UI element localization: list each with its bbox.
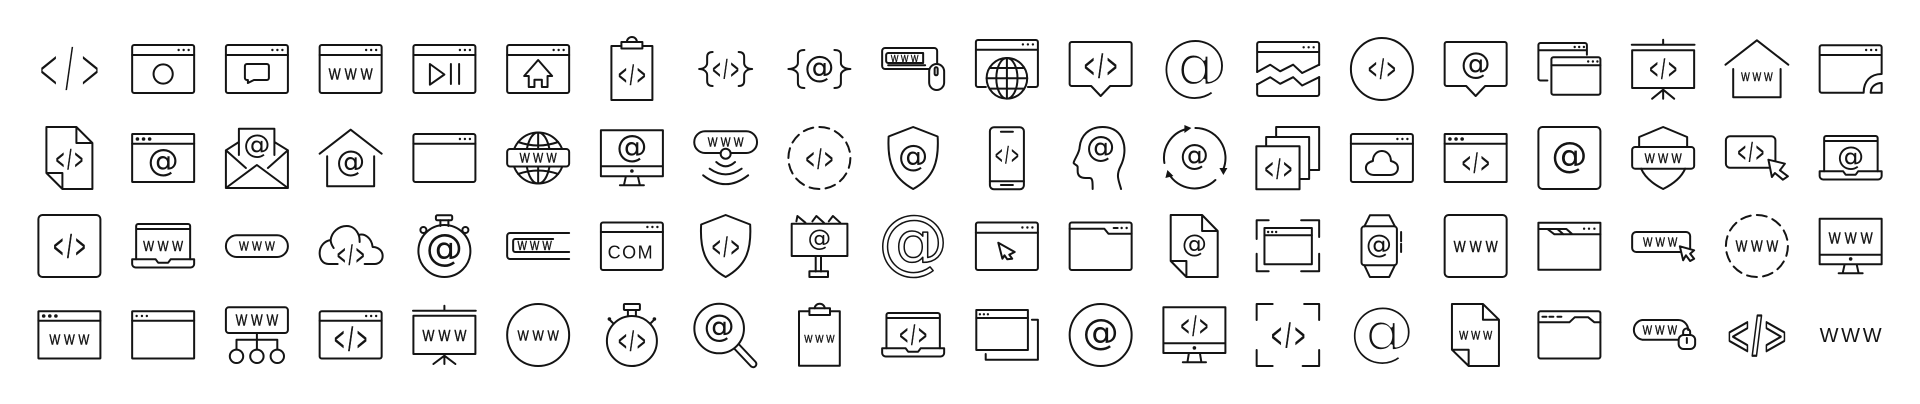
icon: presentation board with code: </> bbox=[1649, 54, 1680, 85]
icon: rounded square with at sign: @ bbox=[1551, 136, 1587, 177]
icon: two overlapping windows bbox=[1538, 43, 1600, 95]
icon: www box with cursor bbox=[1632, 232, 1694, 261]
icon: browser with code bbox=[1445, 134, 1507, 182]
icon: www address bar: WWW bbox=[517, 240, 555, 253]
icon: rounded square with www bbox=[1445, 215, 1507, 277]
icon: clipboard with code: </> bbox=[618, 59, 649, 91]
icon: browser with www: WWW bbox=[329, 66, 377, 84]
icon: code in scan brackets bbox=[1257, 304, 1319, 366]
icon: browser with tabs bbox=[1538, 223, 1600, 270]
icon: code box with cursor: </> bbox=[1738, 138, 1767, 168]
icon: clipboard with www: WWW bbox=[804, 333, 837, 346]
icon: browser with large code: </> bbox=[334, 321, 371, 358]
icon: stopwatch with code: </> bbox=[618, 325, 649, 357]
icon: shield with www label bbox=[1632, 127, 1694, 189]
icon: code tag: </> bbox=[39, 36, 107, 104]
icon: house with www bbox=[1726, 40, 1788, 97]
icon: code in circle bbox=[1351, 38, 1413, 100]
icon: at sign: @ bbox=[1348, 291, 1416, 370]
icon: outlined code tag: </> bbox=[1728, 305, 1789, 366]
icon: clipboard with www bbox=[799, 304, 840, 366]
icon: shield with code: </> bbox=[712, 232, 743, 263]
icon: shield with at sign bbox=[888, 127, 938, 189]
icon: clipboard with code bbox=[611, 37, 652, 100]
icon: www in dashed circle: WWW bbox=[1736, 237, 1782, 255]
icon: shield with at sign: @ bbox=[898, 139, 928, 174]
icon: code in dashed circle bbox=[788, 127, 850, 189]
icon: envelope with letter bbox=[226, 129, 288, 188]
icon: envelope with letter: @ bbox=[243, 129, 270, 160]
icon: shield with code bbox=[701, 215, 750, 277]
icon: code in circle: </> bbox=[1368, 54, 1399, 85]
icon: www network tree bbox=[226, 307, 288, 363]
icon: laptop with code: </> bbox=[899, 320, 930, 351]
icon: code in braces bbox=[699, 52, 752, 86]
icon: monitor with at sign: @ bbox=[616, 129, 647, 165]
icon: monitor with at sign bbox=[601, 129, 663, 185]
icon: document with www bbox=[1452, 304, 1499, 366]
icon: empty browser with left dots bbox=[132, 311, 194, 358]
icon: www pill with lock: WWW bbox=[1643, 325, 1680, 338]
icon: outlined at sign: @ bbox=[878, 200, 948, 282]
icon: stopwatch with at sign bbox=[418, 215, 470, 277]
icon: rounded square with code: </> bbox=[53, 230, 89, 265]
icon: browser with large code bbox=[320, 311, 382, 358]
icon: document with www: WWW bbox=[1459, 329, 1495, 343]
icon: laptop with at sign bbox=[1820, 136, 1882, 180]
icon: www pill with wifi signal: WWW bbox=[708, 136, 747, 150]
icon: stacked code pages: </> bbox=[1265, 153, 1295, 185]
icon: smartphone with code: </> bbox=[995, 144, 1021, 170]
icon: code box with cursor bbox=[1726, 136, 1788, 180]
icon: stacked code pages bbox=[1256, 127, 1319, 189]
icon: speech bubble with at sign: @ bbox=[1461, 46, 1491, 81]
icon: folder style window bbox=[1070, 222, 1132, 270]
icon: browser with house bbox=[507, 45, 569, 93]
icon: billboard with at sign bbox=[792, 216, 847, 277]
icon: window in scan brackets bbox=[1257, 220, 1319, 271]
icon: head with at sign: @ bbox=[1086, 130, 1115, 164]
icon: at sign in braces: @ bbox=[804, 50, 834, 85]
icon: www pill with lock bbox=[1634, 320, 1695, 349]
icon: presentation board with www: WWW bbox=[422, 328, 470, 345]
icon: document with code: </> bbox=[56, 144, 86, 175]
icon: www search bar with mouse: WWW bbox=[891, 53, 921, 64]
icon: www search bar with mouse bbox=[882, 48, 944, 90]
icon: browser with www and left dots: WWW bbox=[49, 331, 93, 348]
icon: shield with www label: WWW bbox=[1645, 151, 1685, 166]
icon: globe with www label bbox=[507, 132, 569, 184]
icon: browser with cloud bbox=[1351, 134, 1413, 182]
icon: billboard with at sign: @ bbox=[808, 224, 831, 252]
icon: www box with cursor: WWW bbox=[1643, 237, 1680, 250]
icon: www pill bbox=[226, 235, 288, 257]
icon: www in circle: WWW bbox=[517, 327, 562, 344]
icon: document with at sign: @ bbox=[1182, 229, 1207, 258]
icon: document with code bbox=[46, 127, 92, 189]
icon: smartwatch with at sign bbox=[1362, 215, 1401, 277]
icon: rounded square with at sign bbox=[1538, 127, 1600, 189]
icon: code in dashed circle: </> bbox=[806, 144, 836, 175]
icon: www pill with wifi signal bbox=[694, 131, 757, 184]
icon: www text: WWW bbox=[1820, 325, 1884, 347]
icon: rounded square with www: WWW bbox=[1454, 239, 1502, 256]
icon: browser with at sign bbox=[132, 134, 194, 182]
icon: monitor with www: WWW bbox=[1829, 230, 1877, 248]
icon: monitor with code bbox=[1163, 307, 1225, 362]
icon: www in circle bbox=[507, 304, 569, 366]
icon: rounded square with code bbox=[38, 215, 100, 277]
icon: at sign with cycle arrows bbox=[1164, 125, 1227, 188]
icon: code in braces: </> bbox=[712, 55, 742, 85]
icon: browser with code: </> bbox=[1462, 147, 1493, 179]
icon: presentation board with code bbox=[1632, 40, 1695, 99]
icon: browser with COM: COM bbox=[608, 242, 654, 262]
icon: house with at sign bbox=[320, 130, 382, 186]
icon: magnifier with at sign: @ bbox=[704, 309, 735, 345]
icon: at sign with cycle arrows: @ bbox=[1180, 138, 1209, 172]
icon: stopwatch with code bbox=[607, 304, 657, 366]
icon: at sign in circle: @ bbox=[1083, 313, 1119, 354]
icon: at sign in circle bbox=[1070, 304, 1132, 366]
icon: browser with play pause bbox=[413, 45, 475, 93]
icon: broken browser window bbox=[1257, 42, 1319, 96]
icon: browser with www bbox=[320, 45, 382, 93]
icon: cloud with code bbox=[320, 226, 383, 271]
icon: laptop with www bbox=[132, 224, 194, 268]
icon: presentation board with www bbox=[413, 306, 476, 364]
icon: browser with cursor bbox=[976, 222, 1038, 270]
icon: www network tree: WWW bbox=[236, 311, 282, 329]
icon: www in dashed circle bbox=[1726, 215, 1788, 277]
icon: browser with circle bbox=[132, 45, 194, 93]
icon: magnifier with at sign bbox=[694, 304, 756, 367]
icon: large at sign: @ bbox=[1159, 23, 1229, 105]
icon: cloud with code: </> bbox=[337, 239, 368, 271]
icon: empty browser bbox=[413, 134, 475, 182]
icon: window with peeled corner bbox=[1820, 45, 1882, 93]
icon: www address bar bbox=[507, 233, 569, 259]
icon: speech bubble with at sign bbox=[1445, 42, 1507, 96]
icon: house with at sign: @ bbox=[336, 144, 365, 178]
icon: globe with www label: WWW bbox=[520, 151, 560, 166]
icon: browser with chat bubble bbox=[226, 45, 288, 93]
icon: code in scan brackets: </> bbox=[1271, 316, 1309, 355]
icon: monitor with www bbox=[1820, 219, 1882, 273]
icon: smartwatch with at sign: @ bbox=[1366, 230, 1392, 260]
icon: laptop with code bbox=[882, 313, 944, 356]
icon: house with www: WWW bbox=[1741, 72, 1776, 84]
icon: browser with globe bbox=[976, 40, 1038, 99]
icon: speech bubble with code bbox=[1070, 42, 1132, 96]
icon: document with at sign bbox=[1171, 215, 1218, 277]
icon: head with at sign bbox=[1074, 127, 1124, 189]
icon: www pill: WWW bbox=[239, 240, 278, 254]
icon: stopwatch with at sign: @ bbox=[426, 226, 463, 269]
icon: browser with www and left dots bbox=[38, 311, 100, 358]
icon: laptop with at sign: @ bbox=[1837, 141, 1864, 172]
icon: monitor with code: </> bbox=[1181, 310, 1211, 342]
icon: folder tab window bbox=[1538, 311, 1600, 358]
icon: two windows offset bbox=[976, 310, 1038, 360]
icon: speech bubble with code: </> bbox=[1084, 47, 1121, 85]
icon: laptop with www: WWW bbox=[143, 238, 187, 255]
icon: smartphone with code bbox=[990, 127, 1024, 189]
icon: browser with COM bbox=[601, 222, 663, 270]
icon: at sign in braces bbox=[788, 50, 850, 88]
icon: browser with at sign: @ bbox=[148, 143, 179, 179]
